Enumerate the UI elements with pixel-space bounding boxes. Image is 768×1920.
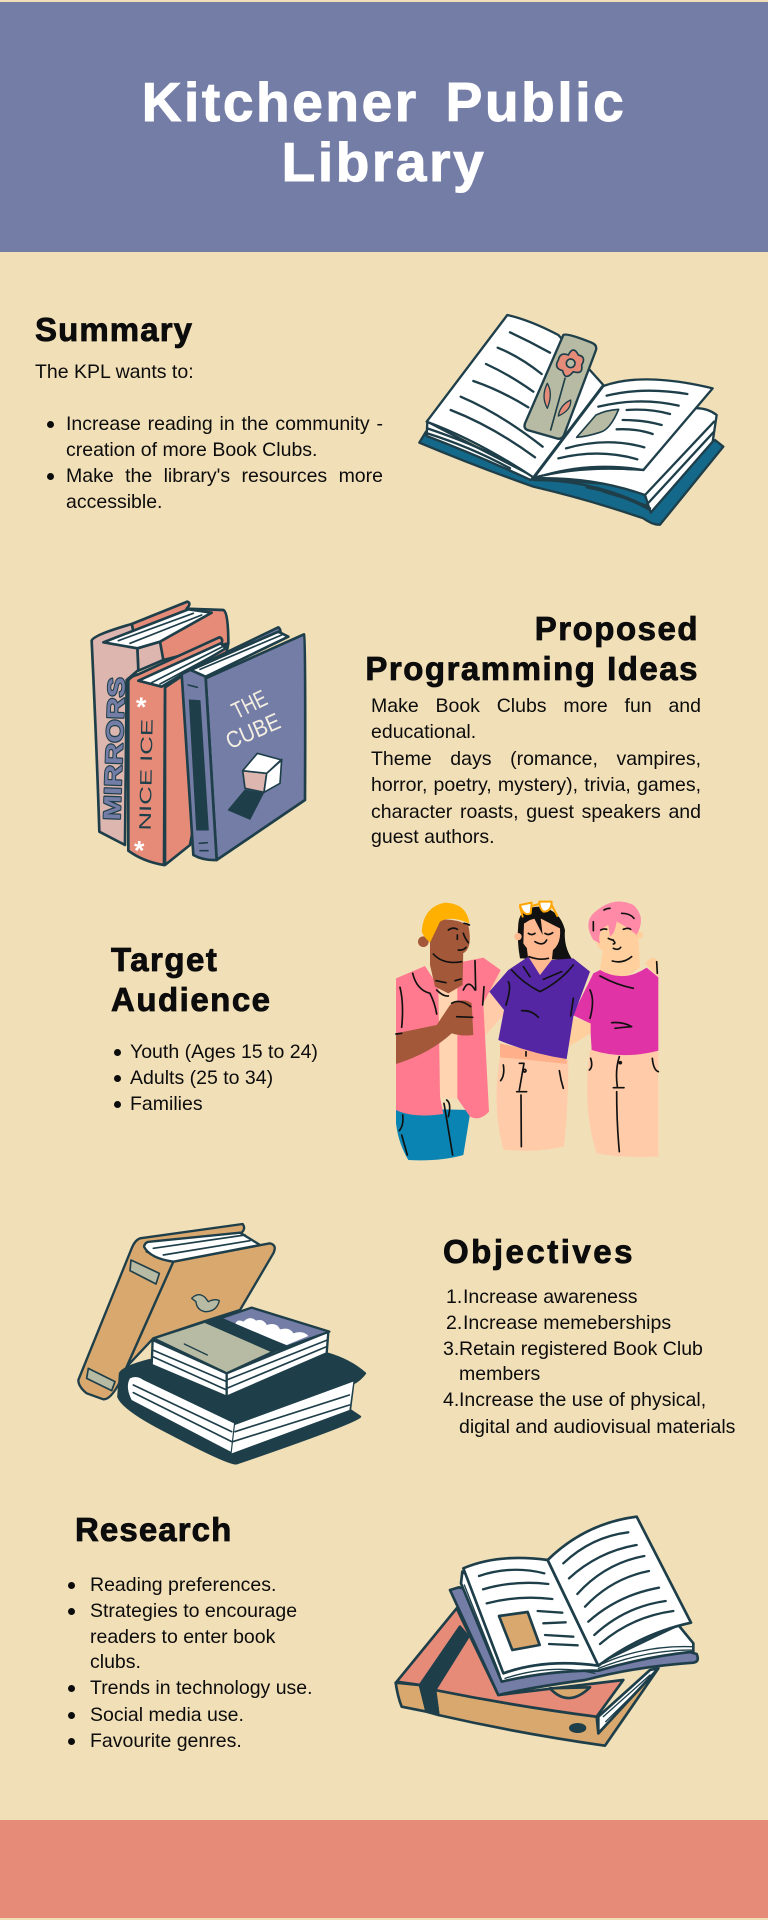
heading: proposed programming ideas: Programming Ideas xyxy=(365,650,699,687)
icon: three upright books: * xyxy=(134,835,145,865)
list: objectives: Retain registered Book Club xyxy=(459,1338,703,1360)
book title: mirrors: MIRRORS xyxy=(99,677,131,821)
book title: the cube xyxy=(222,685,284,754)
footer band xyxy=(0,1820,768,1918)
heading: research: Research xyxy=(75,1511,232,1548)
text: programming ideas: horror, poetry, mystery), trivia, games, xyxy=(371,774,701,796)
list: objectives: 3. xyxy=(443,1338,459,1360)
list: research topics: Social media use. xyxy=(90,1704,244,1726)
icon: three friends xyxy=(395,900,660,1160)
list: research topics: readers to enter book xyxy=(90,1626,275,1648)
list: research topics xyxy=(68,1574,313,1752)
list: audiences: Adults (25 to 34) xyxy=(130,1067,273,1089)
heading: target audience xyxy=(110,941,272,1018)
icon: stack of books xyxy=(77,1222,366,1464)
list: research topics: clubs. xyxy=(90,1651,141,1673)
heading: objectives: Objectives xyxy=(443,1233,635,1270)
glasses xyxy=(520,902,552,914)
list: research topics: Reading preferences. xyxy=(90,1574,276,1596)
list: summary goals: accessible. xyxy=(66,491,162,513)
text: programming ideas xyxy=(371,695,701,848)
list: audiences: Youth (Ages 15 to 24) xyxy=(130,1041,318,1063)
list: objectives xyxy=(443,1286,735,1438)
list: audiences: Families xyxy=(130,1093,203,1115)
list: research topics: Favourite genres. xyxy=(90,1730,242,1752)
list: objectives: 4. xyxy=(443,1389,459,1411)
list: objectives: Increase awareness xyxy=(463,1286,638,1308)
text: programming ideas: Make Book Clubs more fun and xyxy=(371,695,701,717)
heading: summary: Summary xyxy=(35,311,193,348)
list: audiences xyxy=(114,1041,318,1115)
panel: proposed programming ideas xyxy=(365,610,701,848)
icon: three upright books xyxy=(90,600,306,866)
text: programming ideas: Theme days (romance, vampires, xyxy=(371,748,701,770)
list: objectives: 1. xyxy=(446,1286,462,1308)
heading: proposed programming ideas: Proposed xyxy=(535,610,699,647)
text: programming ideas: guest authors. xyxy=(371,826,495,848)
list: summary goals: Make the library's resources more xyxy=(66,465,383,487)
icon: open book with bookmark xyxy=(418,314,725,526)
icon: open book on closed books xyxy=(394,1515,700,1747)
heading: target audience: Audience xyxy=(111,981,272,1018)
heading: target audience: Target xyxy=(111,941,218,978)
panel: research xyxy=(68,1511,313,1752)
book title: the cube: THE xyxy=(227,685,271,724)
list: research topics: Strategies to encourage xyxy=(90,1600,297,1622)
text: intro: The KPL wants to: xyxy=(35,361,194,383)
list: objectives: digital and audiovisual materials xyxy=(459,1416,735,1438)
title: Library xyxy=(282,131,486,193)
list: summary goals xyxy=(47,413,383,513)
list: objectives: Increase memeberships xyxy=(463,1312,671,1334)
list: summary goals: creation of more Book Clubs. xyxy=(66,439,317,461)
list: objectives: Increase the use of physical, xyxy=(459,1389,706,1411)
heading: proposed programming ideas xyxy=(365,610,699,688)
panel: objectives xyxy=(443,1233,735,1438)
title xyxy=(142,71,626,193)
book title: nice ice: NICE ICE xyxy=(136,719,157,831)
book title: the cube: CUBE xyxy=(222,708,284,754)
list: research topics: Trends in technology use. xyxy=(90,1677,313,1699)
header band xyxy=(0,2,768,252)
list: objectives: members xyxy=(459,1363,540,1385)
list: objectives: 2. xyxy=(446,1312,462,1334)
list: summary goals: Increase reading in the community - xyxy=(66,413,383,435)
icon: three upright books: * xyxy=(136,692,147,722)
text: programming ideas: character roasts, guest speakers and xyxy=(371,801,701,823)
panel: summary xyxy=(35,311,383,513)
left person xyxy=(396,1108,471,1160)
panel: target audience xyxy=(110,941,318,1115)
right person xyxy=(587,1050,658,1157)
text: programming ideas: educational. xyxy=(371,721,476,743)
middle person xyxy=(497,1057,568,1151)
title: Kitchener Public xyxy=(142,71,626,133)
